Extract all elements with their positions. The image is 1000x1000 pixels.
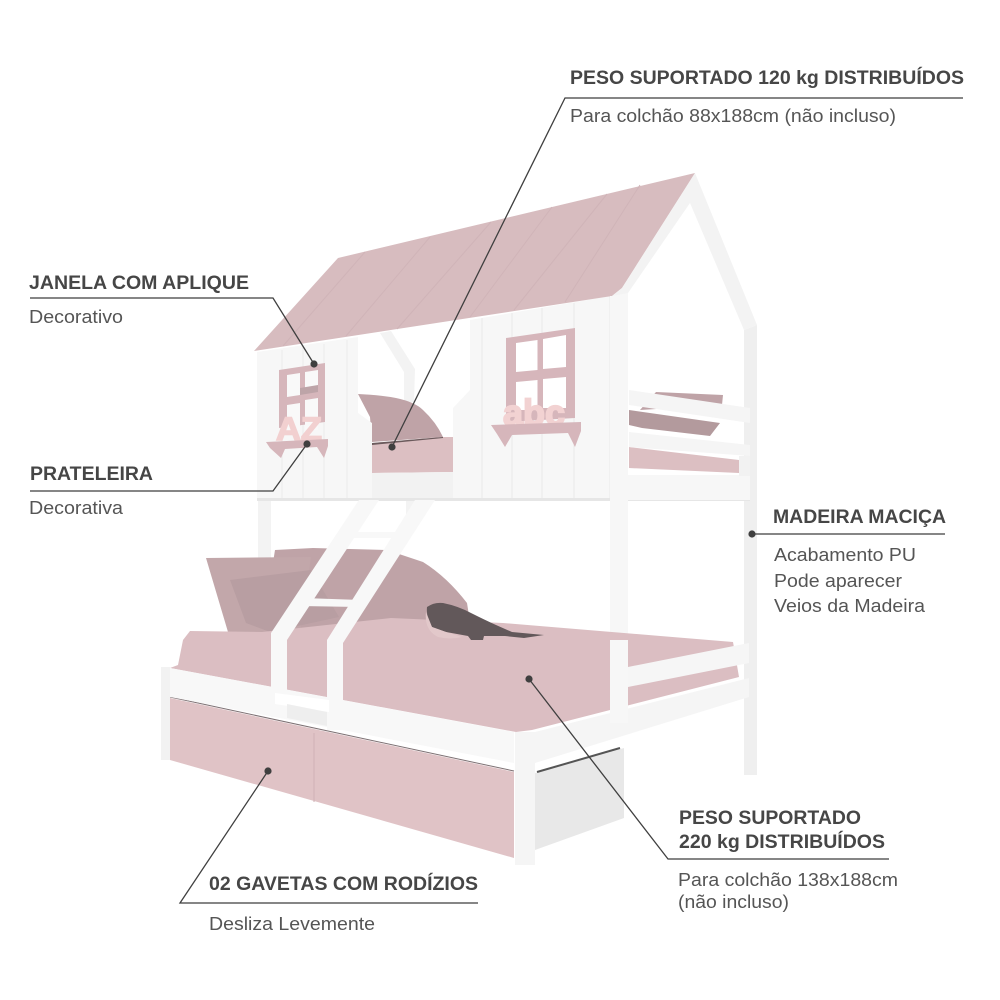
- leader line: upper weight: [388, 98, 963, 451]
- right window with abc letters: [491, 328, 581, 447]
- leader line: window: [30, 298, 318, 368]
- inner gable frame: [380, 331, 415, 402]
- lower bed frame: [161, 643, 749, 865]
- right tall post: [744, 325, 757, 775]
- callout: solid wood: MADEIRA MACIÇA: [773, 507, 946, 528]
- bottom edge of upper bunk: [257, 498, 750, 501]
- floor band under upper mattress: [372, 472, 453, 500]
- leader line: shelf: [30, 440, 311, 491]
- redraw post in front of lower rail: [610, 640, 628, 723]
- callout: solid wood: Veios da Madeira: [774, 596, 926, 616]
- left window with AZ letters: AZ: [276, 411, 322, 447]
- leader line: drawers: [180, 767, 478, 903]
- callout: shelf: [29, 464, 153, 518]
- lower pillows: [206, 548, 470, 632]
- upper right mattress: [629, 447, 739, 473]
- left wall: [257, 337, 372, 500]
- gable frame: [612, 173, 757, 330]
- callout: solid wood: Acabamento PU: [774, 545, 916, 565]
- callout: shelf: Decorativa: [29, 498, 124, 518]
- right window with abc letters: abc: [503, 392, 565, 433]
- drawers: [170, 697, 514, 858]
- callout: drawers: 02 GAVETAS COM RODÍZIOS: [209, 873, 478, 895]
- ladder: [271, 500, 435, 730]
- side of drawer: [535, 748, 624, 850]
- callout: upper weight: PESO SUPORTADO 120 kg DISTRIBUÍDOS: [570, 67, 964, 89]
- callout: solid wood: Pode aparecer: [774, 571, 902, 591]
- callout: upper weight: [570, 67, 964, 126]
- lower mattress: [170, 618, 739, 732]
- whale plush toy: [426, 603, 544, 640]
- back posts: [258, 495, 415, 563]
- callout: lower weight: Para colchão 138x188cm: [678, 870, 898, 890]
- illustration: house bunk bed: [161, 173, 757, 865]
- callout: window: JANELA COM APLIQUE: [29, 273, 249, 294]
- left window with AZ letters: [266, 363, 328, 458]
- callout: lower weight: [678, 808, 898, 912]
- upper mattress: [372, 437, 453, 473]
- callout: lower weight: 220 kg DISTRIBUÍDOS: [679, 831, 885, 853]
- roof: [254, 173, 695, 351]
- right upper rails: [612, 390, 750, 500]
- upper pillows: [358, 392, 723, 442]
- callout: window: Decorativo: [29, 307, 123, 327]
- right wall: [453, 293, 628, 500]
- right front post: [610, 296, 628, 723]
- callout: lower weight: PESO SUPORTADO: [679, 808, 861, 829]
- leader line: solid wood: [748, 530, 945, 538]
- callout: shelf: PRATELEIRA: [30, 464, 153, 485]
- callout: drawers: Desliza Levemente: [209, 914, 375, 934]
- callout: window: [29, 273, 249, 327]
- callout: upper weight: Para colchão 88x188cm (não incluso): [570, 106, 896, 126]
- callout: lower weight: (não incluso): [678, 892, 789, 912]
- callout: drawers: [209, 873, 478, 934]
- leader line: lower weight: [525, 675, 889, 859]
- callout: solid wood: [773, 507, 946, 616]
